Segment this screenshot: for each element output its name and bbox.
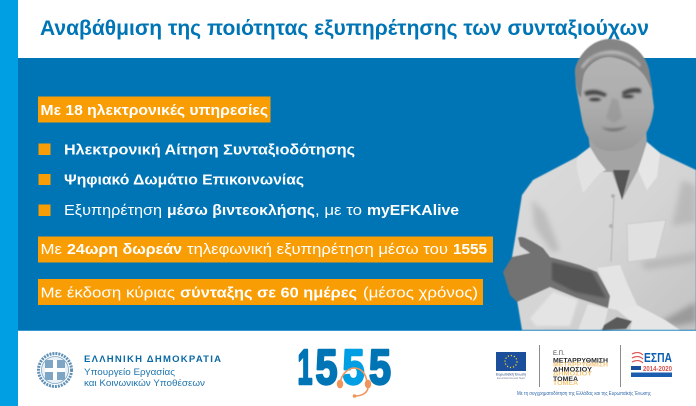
head — [575, 39, 654, 151]
divider — [620, 345, 621, 387]
logo: public sector reform: Ε.Π. — [553, 351, 565, 357]
logo: public sector reform: ΤΟΜΕΑ — [553, 376, 578, 383]
lower left sleeve highlight — [530, 292, 578, 326]
collar right — [638, 142, 660, 190]
list item 3 — [38, 202, 459, 219]
panel: main blue — [18, 58, 696, 331]
logo: 1555 helpline: 5 — [342, 341, 364, 395]
lower sleeve — [617, 305, 680, 330]
list item 2: Ψηφιακό Δωμάτιο Επικοινωνίας — [64, 172, 304, 188]
collar left — [577, 147, 606, 193]
shirt cuff — [597, 265, 637, 310]
nose shading — [606, 98, 622, 123]
mouth — [601, 126, 627, 131]
badge: 24h phone service: Με — [40, 241, 62, 258]
shirt shading folds — [532, 180, 696, 326]
shirt placket line — [611, 198, 614, 262]
forearm hair texture — [552, 262, 606, 298]
ministry text: Υπουργείο Εργασίας — [84, 367, 175, 378]
icon: orange headset — [338, 368, 370, 397]
list item 3: , με το — [315, 202, 362, 219]
logo: European Union — [496, 352, 526, 380]
shirt pocket — [627, 220, 666, 262]
logo: ESPA 2014-2020: ΕΣΠΑ — [644, 350, 672, 365]
logo: public sector reform: ΔΗΜΟΣΙΟΥ — [553, 370, 592, 378]
logo: ESPA 2014-2020: 2014-2020 — [643, 366, 672, 373]
caption: co-financing: Με τη συγχρηματοδότηση της Ελλάδας και της Ευρωπαϊκής Ένωσης — [517, 390, 652, 397]
neck shadow opening — [613, 170, 630, 200]
logo: European Union: Ευρωπαϊκό Κοινωνικό Ταμείο — [497, 376, 525, 380]
badge: pension in 60 days — [38, 279, 483, 305]
badge: 18 e-services — [38, 96, 270, 122]
list item 3: myEFKAlive — [367, 202, 459, 219]
forearm and hand — [503, 237, 611, 308]
logo: public sector reform: ΜΕΤΑΡΡΥΘΜΙΣΗ — [553, 358, 608, 364]
badge: 24h phone service — [38, 236, 493, 262]
logo: public sector reform — [553, 351, 608, 387]
shirt torso — [512, 142, 696, 330]
logo: public sector reform: ΜΕΤΑΡΡΥΘΜΙΣΗ — [553, 362, 608, 368]
list item 3: Εξυπηρέτηση — [64, 202, 162, 219]
logo: European Union: Ευρωπαϊκή Ένωση — [496, 372, 526, 376]
logo: 1555 helpline: 5 — [316, 341, 338, 395]
eyebrows — [584, 88, 641, 97]
hair highlights — [582, 52, 640, 68]
other cuff — [578, 304, 608, 330]
logo: public sector reform: ΔΗΜΟΣΙΟΥ — [553, 366, 592, 374]
eyes — [589, 95, 634, 101]
logo: 1555 helpline: 5 — [369, 341, 391, 395]
logo: 1555 helpline — [298, 341, 391, 397]
badge: 24h phone service: 24ωρη δωρεάν — [67, 241, 182, 258]
badge: 24h phone service: 1555 — [453, 241, 487, 258]
badge: pension in 60 days: Με έκδοση κύριας — [40, 284, 175, 302]
logo: public sector reform: ΤΟΜΕΑ — [553, 380, 578, 387]
title: Αναβάθμιση της ποιότητας εξυπηρέτησης των συνταξιούχων — [40, 17, 649, 40]
left accent bar — [0, 0, 18, 406]
logo: ESPA 2014-2020 — [631, 350, 672, 377]
badge: pension in 60 days: (μέσος χρόνος) — [363, 284, 478, 302]
illustration: man in white shirt — [503, 39, 696, 330]
divider — [539, 345, 540, 387]
lower dark gap — [602, 317, 632, 330]
icon: Hellenic Republic emblem — [38, 354, 72, 386]
badge: 24h phone service: τηλεφωνική εξυπηρέτηση μέσω του — [187, 241, 448, 258]
ministry text: ΕΛΛΗΝΙΚΗ ΔΗΜΟΚΡΑΤΙΑ — [84, 354, 221, 365]
shirt buttons — [609, 194, 615, 228]
logo: 1555 helpline: 1 — [298, 341, 312, 395]
badge: 18 e-services: Με 18 ηλεκτρονικές υπηρεσίες — [40, 102, 268, 119]
neck — [588, 128, 647, 200]
badge: pension in 60 days: σύνταξης σε 60 ημέρες — [180, 284, 357, 302]
list item 1: Ηλεκτρονική Αίτηση Συνταξιοδότησης — [64, 142, 355, 158]
hair — [575, 39, 653, 98]
ministry text — [84, 354, 221, 389]
list item 3: μέσω βιντεοκλήσης — [167, 202, 315, 219]
ministry text: και Κοινωνικών Υποθέσεων — [84, 378, 205, 389]
